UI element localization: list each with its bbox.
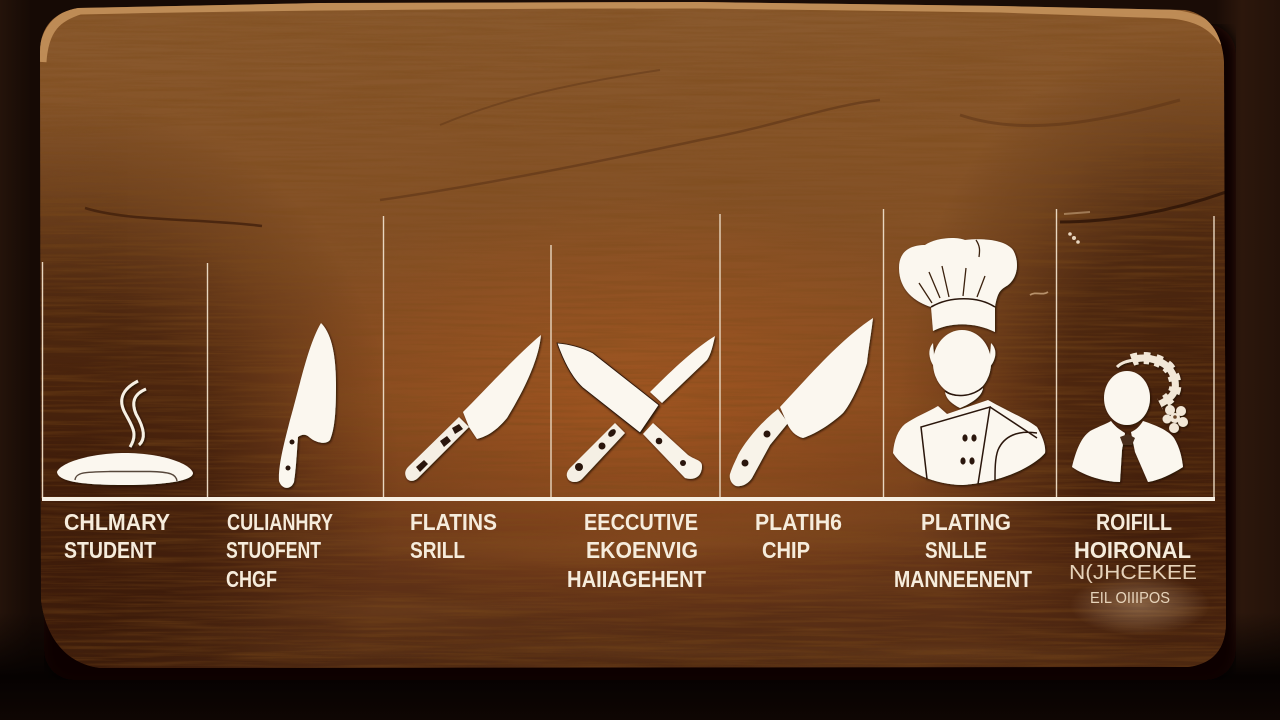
horizontal baseline xyxy=(42,497,1215,501)
column 6 label: MANNEENENT xyxy=(894,566,1032,592)
column 4 label: EKOENVIG xyxy=(586,537,698,563)
column 1 label: STUDENT xyxy=(64,537,156,563)
icon: chef with toque xyxy=(893,238,1045,485)
column 3 label xyxy=(410,509,497,563)
column 3 label: FLATINS xyxy=(410,509,497,535)
vertical column dividers xyxy=(42,209,1214,498)
icon: plate with steam xyxy=(57,381,193,485)
column 5 label: CHIP xyxy=(762,537,810,563)
column 5 label xyxy=(755,509,842,563)
column 5 label: PLATIH6 xyxy=(755,509,842,535)
column 1 label: CHLMARY xyxy=(64,509,170,535)
column 2 label: CHGF xyxy=(226,566,277,592)
column 4 label: EECCUTIVE xyxy=(584,509,698,535)
column 6 label: PLATING xyxy=(921,509,1011,535)
chef hat xyxy=(899,238,1017,332)
top rim highlight xyxy=(42,4,1224,62)
icon: crossed knives xyxy=(557,336,715,482)
column 2 label xyxy=(226,509,333,592)
column 6 label xyxy=(894,509,1032,592)
column 2 label: STUOFENT xyxy=(226,537,321,563)
column 1 label xyxy=(64,509,170,563)
column 7 label xyxy=(1069,509,1197,607)
column 7 label: ROIFILL xyxy=(1096,509,1172,535)
column 7 label: N(JHCEKEE xyxy=(1069,562,1197,584)
icon: cleaver knife xyxy=(279,323,336,488)
column 3 label: SRILL xyxy=(410,537,465,563)
column 2 label: CULIANHRY xyxy=(227,509,333,535)
column 4 label: HAIIAGEHENT xyxy=(567,566,706,592)
chef jacket xyxy=(893,400,1045,485)
chef head xyxy=(929,330,995,408)
column 4 label xyxy=(567,509,706,592)
icon: person with gear and flower xyxy=(1072,358,1188,482)
icon: large chef knife xyxy=(730,318,873,486)
column 7 label: EIL OIIIPOS xyxy=(1090,590,1170,607)
icon: chef knife with dark rivets xyxy=(405,335,541,481)
column 6 label: SNLLE xyxy=(925,537,987,563)
column 7 label: HOIRONAL xyxy=(1074,537,1191,563)
